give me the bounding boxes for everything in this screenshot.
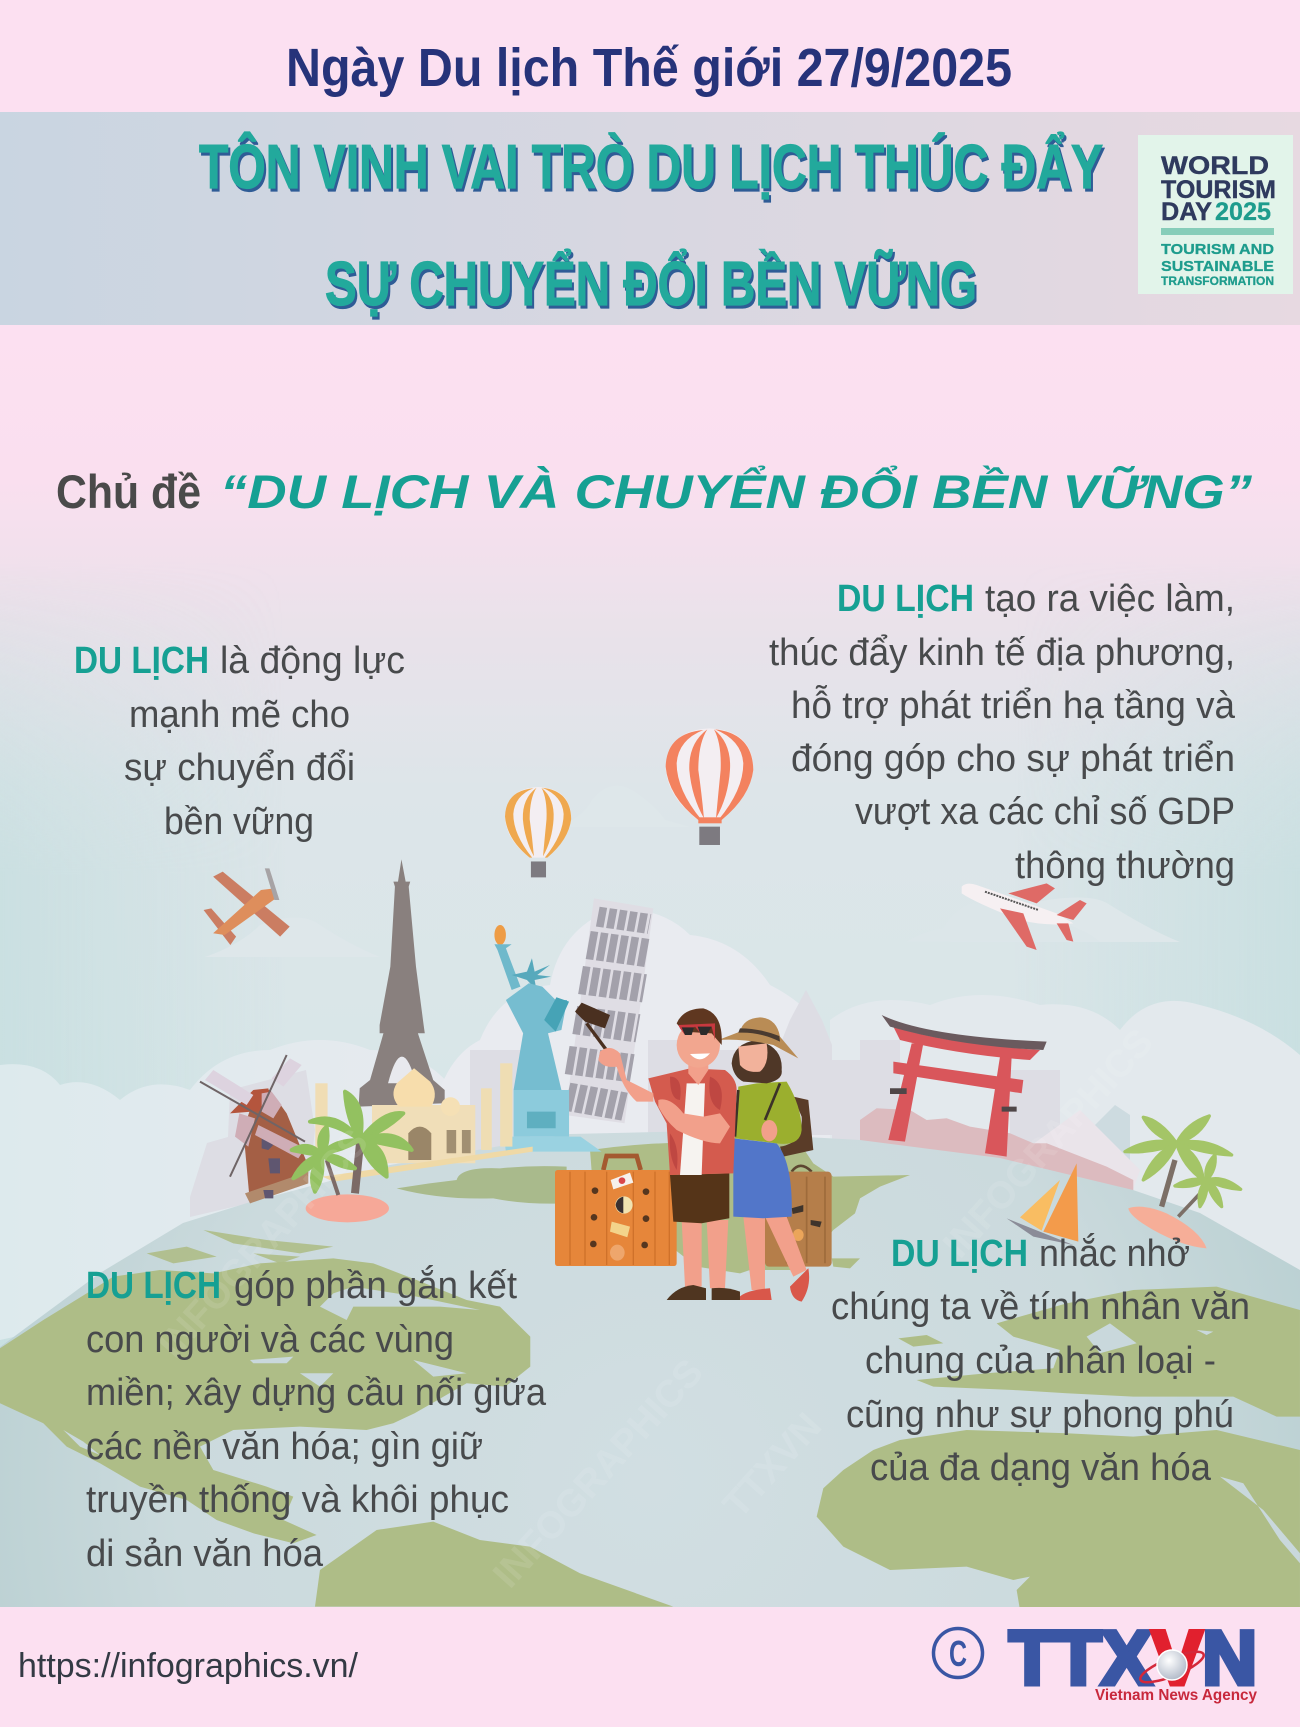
logo: World Tourism Day 2025: WORLD [1161, 152, 1269, 180]
text block: bottom right [831, 1232, 1250, 1489]
sailboat and island [1007, 1163, 1207, 1248]
main title: Ngày Du lịch Thế giới 27/9/2025 [286, 38, 1012, 98]
central patch [397, 1166, 567, 1204]
text block: top right: đóng góp cho sự phát triển [791, 738, 1235, 780]
watermarks: INFOGRAPHICS [150, 1121, 377, 1366]
text block: bottom left: các nền văn hóa; gìn giữ [86, 1426, 483, 1468]
text block: bottom left [86, 1264, 547, 1575]
text block: bottom left: con người và các vùng [86, 1319, 454, 1361]
logo: World Tourism Day 2025: DAY [1161, 198, 1212, 226]
text block: bottom left: góp phần gắn kết [234, 1264, 517, 1307]
icon: torii gate [882, 1015, 1047, 1157]
logo: World Tourism Day 2025: 2025 [1215, 198, 1271, 226]
city silhouettes [190, 990, 1140, 1217]
icon: island [1128, 1207, 1207, 1248]
icon: palm trees [1125, 1116, 1241, 1217]
text block: bottom right: chúng ta về tính nhân văn [831, 1286, 1250, 1328]
logo: TTXVN: Vietnam News Agency [1095, 1687, 1257, 1704]
text block: bottom right: cũng như sự phong phú [846, 1394, 1234, 1436]
watermarks [150, 1021, 1162, 1596]
icon: palm trees and island [292, 1092, 412, 1222]
text block: top right: DU LỊCH [837, 578, 974, 620]
icon: tourist man with selfie stick [575, 1003, 740, 1300]
text block: bottom left: DU LỊCH [86, 1265, 221, 1307]
text block: top left: sự chuyển đổi [124, 747, 355, 789]
South America [315, 1522, 673, 1607]
sky edge tint [0, 650, 1300, 1346]
icon: copyright: C [949, 1633, 967, 1674]
banner heading: SỰ CHUYỂN ĐỔI BỀN VỮNG [327, 252, 979, 322]
text block: top left: mạnh mẽ cho [129, 694, 350, 736]
text block: top left: là động lực [220, 640, 405, 682]
temple wall behind torii [860, 1108, 1133, 1193]
sky background [0, 325, 1300, 1610]
text block: bottom right: DU LỊCH [891, 1233, 1028, 1275]
icon: Taj Mahal [315, 1063, 533, 1182]
logo: TTXVN: TTXVN [1009, 1616, 1257, 1701]
icon: orange suitcase [555, 1156, 677, 1266]
text block: top left: DU LỊCH [74, 640, 209, 682]
Africa [817, 1430, 1300, 1610]
icon: propeller plane [204, 868, 290, 945]
text block: top right: thông thường [1015, 845, 1235, 887]
title banner [0, 112, 1300, 325]
left landmarks [315, 859, 653, 1182]
text block: top right [769, 578, 1236, 887]
logo: World Tourism Day 2025: TOURISM AND [1161, 241, 1274, 258]
banner heading: SỰ CHUYỂN ĐỔI BỀN VỮNG [325, 249, 977, 319]
couple and luggage [555, 1003, 832, 1302]
globe [0, 1131, 1300, 1610]
text block: bottom right: của đa dạng văn hóa [870, 1447, 1212, 1489]
icon: orange balloon [505, 787, 571, 877]
text block: bottom left: di sản văn hóa [86, 1533, 324, 1575]
logo: World Tourism Day 2025: TRANSFORMATION [1161, 274, 1274, 288]
patch by suitcases [590, 1142, 910, 1273]
propeller plane and balloons layer [204, 728, 753, 945]
icon: sailboat [1007, 1163, 1078, 1245]
watermarks: INFOGRAPHICS [485, 1351, 712, 1596]
banner heading [199, 133, 1105, 322]
North America [0, 1258, 530, 1543]
icon: red balloon [666, 728, 753, 845]
watermarks: INFOGRAPHICS [935, 1021, 1162, 1266]
icon: brown suitcase [765, 1166, 832, 1267]
logo: World Tourism Day 2025: SUSTAINABLE [1161, 258, 1274, 275]
icon: windmill [200, 1055, 310, 1203]
text block: top left [74, 640, 405, 843]
windmill and palms [200, 1055, 412, 1222]
text block: bottom right: chung của nhân loại - [865, 1340, 1216, 1382]
logo: World Tourism Day 2025: TOURISM [1161, 176, 1276, 204]
text block: top left: bền vững [164, 801, 314, 843]
text block: bottom left: miền; xây dựng cầu nối giữa [86, 1372, 547, 1414]
text block: bottom left: truyền thống và khôi phục [86, 1479, 509, 1521]
clouds [0, 786, 1300, 1340]
icon: jet airplane [907, 883, 1100, 950]
website url: https://infographics.vn/ [18, 1647, 359, 1685]
text block: bottom right: nhắc nhở [1039, 1232, 1190, 1275]
torii, plane and right-hand scene [882, 883, 1241, 1217]
Europe and Asia [917, 1287, 1300, 1417]
logo: World Tourism Day 2025 [1138, 135, 1293, 294]
icon: tourist woman with hat [718, 1017, 813, 1302]
theme heading: “DU LỊCH VÀ CHUYỂN ĐỔI BỀN VỮNG” [220, 465, 1253, 518]
text block: top right: hỗ trợ phát triển hạ tầng và [791, 684, 1236, 727]
footer band [0, 1607, 1300, 1727]
icon: Statue of Liberty [494, 925, 602, 1152]
icon: copyright [934, 1628, 982, 1678]
text block: top right: vượt xa các chỉ số GDP [855, 791, 1235, 833]
text block: top right: thúc đẩy kinh tế địa phương, [769, 632, 1235, 674]
icon: Eiffel tower [359, 859, 445, 1107]
watermarks: TTXVN [715, 1405, 830, 1526]
icon: leaning tower [565, 898, 653, 1123]
text block: top right: tạo ra việc làm, [985, 578, 1235, 620]
continents [0, 1142, 1300, 1610]
theme heading: Chủ đề [56, 465, 201, 518]
